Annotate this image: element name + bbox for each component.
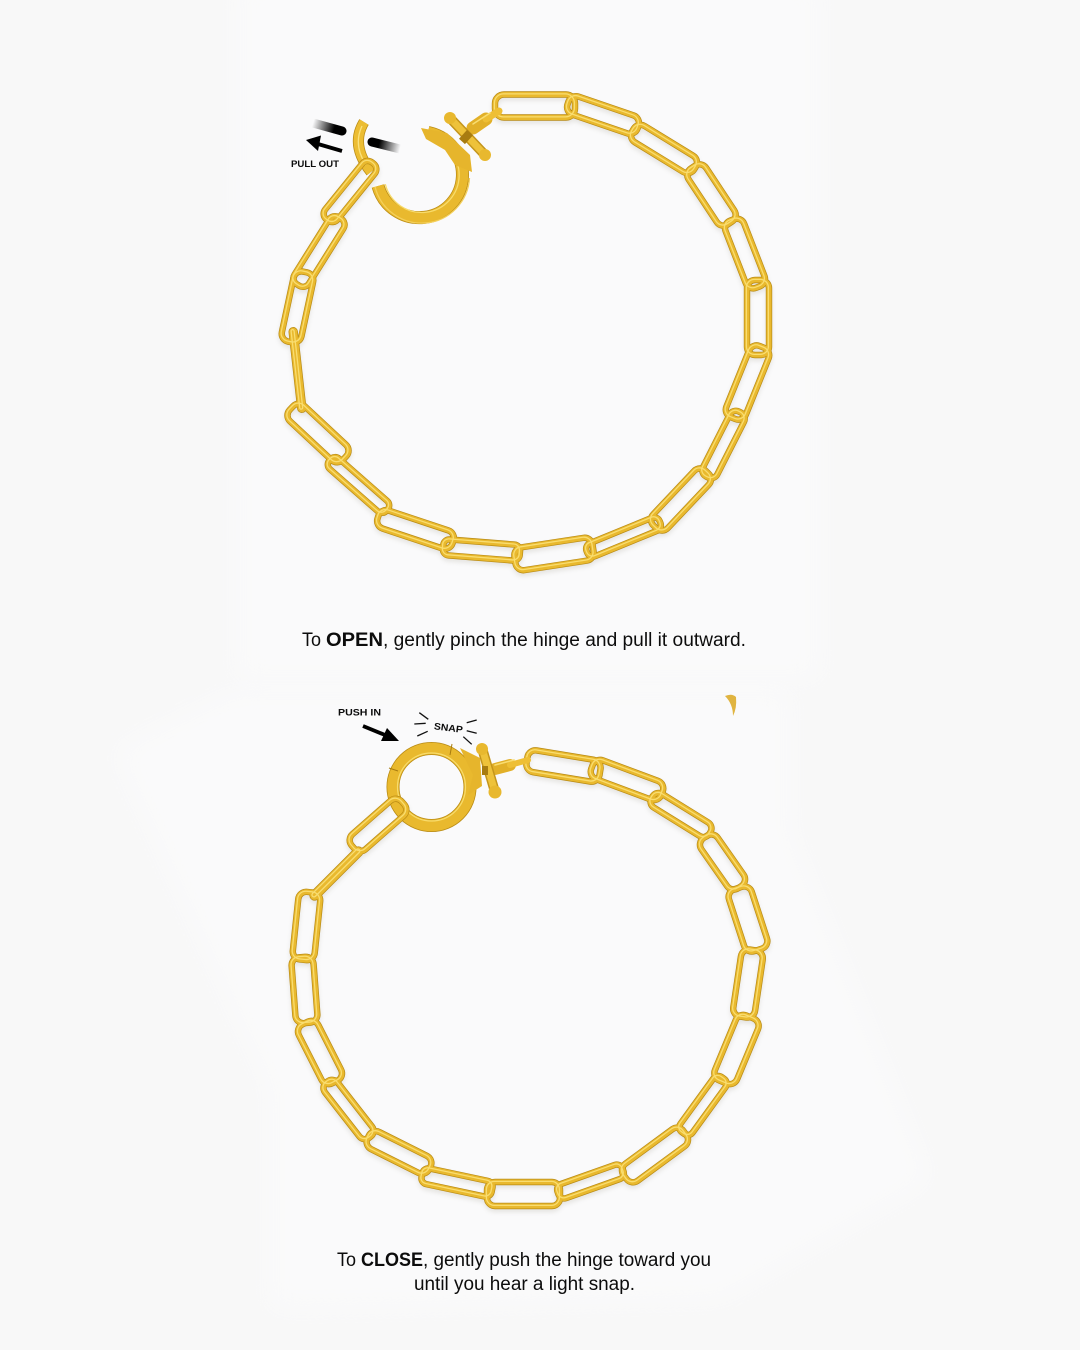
hinge barrel connector	[473, 111, 499, 128]
motion mark: upper blur	[313, 123, 342, 131]
caption: close instruction: until you hear a light snap.	[414, 1274, 635, 1295]
caption: open instruction: To	[302, 630, 321, 651]
caption: open instruction: OPEN	[326, 630, 383, 651]
paperclip chain links	[280, 93, 772, 571]
label: push in: PUSH IN	[338, 708, 381, 718]
hinge bar with balls	[476, 743, 502, 798]
paperclip chain links	[290, 749, 769, 1206]
caption: close instruction: , gently push the hinge toward you	[423, 1250, 711, 1271]
bottom bracelet: closed clasp	[290, 743, 769, 1209]
lighter backdrop behind the bottom bracelet	[115, 690, 930, 1310]
hinge barrel connector	[495, 760, 528, 769]
chain shadow	[291, 752, 769, 1209]
snap rays	[414, 713, 477, 744]
chain shadow	[280, 97, 772, 574]
clasp tip and lug	[421, 128, 472, 172]
motion mark: lower blur	[372, 142, 400, 149]
caption: close instruction	[337, 1250, 711, 1295]
lighter backdrop behind the top bracelet	[237, 0, 820, 680]
caption: close instruction: To	[337, 1250, 356, 1271]
stray gold fragment	[725, 695, 736, 716]
arrow: push in	[363, 726, 399, 741]
arrow: pull out	[306, 136, 342, 151]
caption: open instruction: , gently pinch the hinge and pull it outward.	[383, 630, 746, 651]
caption: close instruction: CLOSE	[361, 1250, 423, 1271]
clasp hinge gate	[358, 122, 371, 172]
label: pull out: PULL OUT	[291, 159, 339, 170]
open clasp ring	[375, 132, 470, 223]
hinge lug	[460, 748, 482, 795]
top bracelet: open clasp	[280, 93, 772, 574]
closed clasp ring	[389, 744, 470, 826]
hinge bar with balls	[444, 112, 491, 161]
label: snap: SNAP	[433, 721, 464, 736]
